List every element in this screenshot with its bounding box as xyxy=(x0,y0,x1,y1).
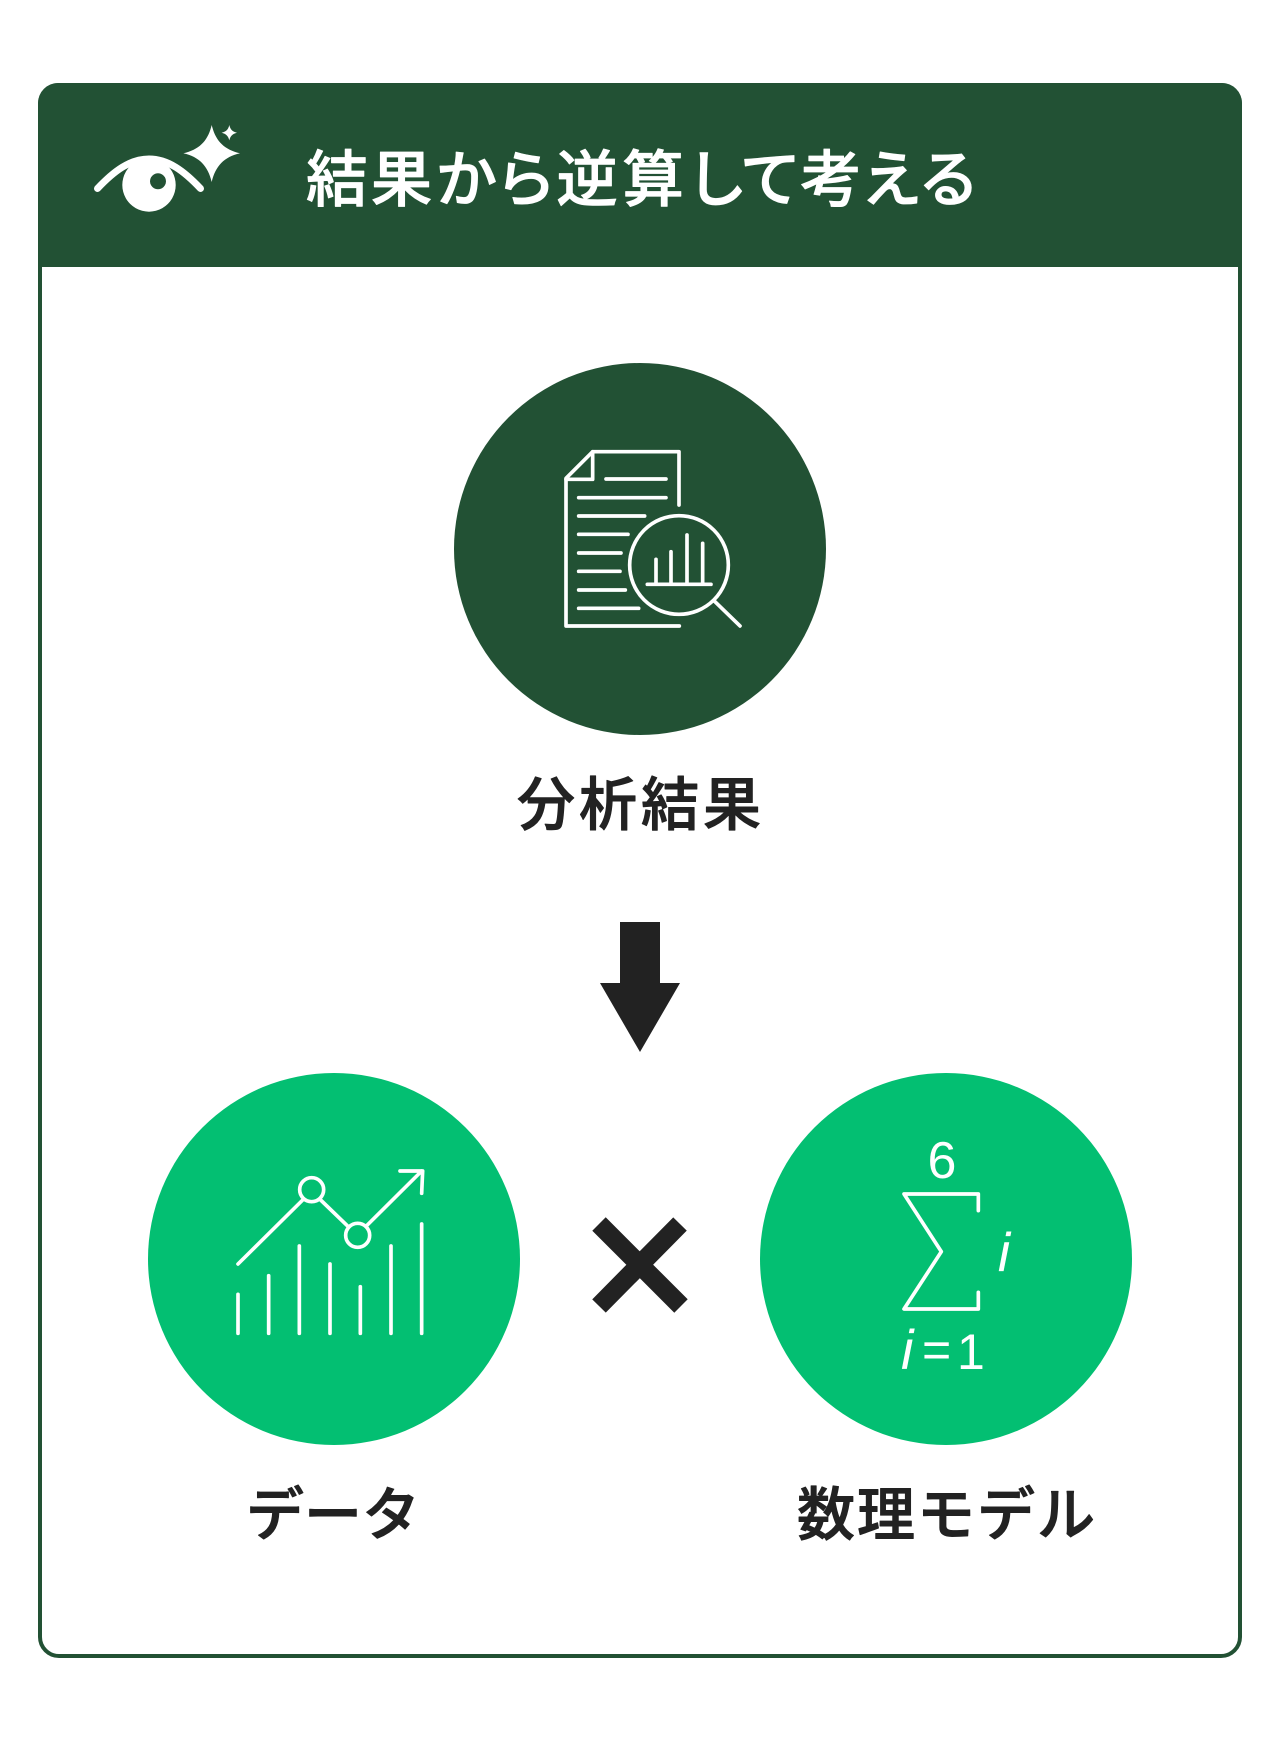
label: math model: 数理モデル xyxy=(797,1483,1097,1548)
formula text: 1 xyxy=(957,1324,985,1380)
title: 結果から逆算して考える xyxy=(306,146,980,215)
formula text: i xyxy=(998,1221,1012,1283)
icon: document with magnifier xyxy=(566,452,740,626)
icon: eye with sparkles xyxy=(98,125,240,212)
circle: data icon xyxy=(148,1073,520,1445)
formula text: 6 xyxy=(928,1132,956,1190)
arrow: down xyxy=(600,922,680,1052)
formula text xyxy=(901,1132,1012,1381)
label: data: データ xyxy=(246,1483,420,1548)
formula text: = xyxy=(922,1322,951,1378)
header band xyxy=(38,83,1242,267)
icon: line and bar chart xyxy=(238,1171,423,1333)
label: analysis result: 分析結果 xyxy=(517,773,765,838)
circle: analysis result icon xyxy=(454,363,826,735)
circle: math model icon xyxy=(760,1073,1132,1445)
formula text: i xyxy=(901,1318,915,1381)
multiply sign xyxy=(599,1224,681,1306)
icon: sigma xyxy=(904,1194,978,1309)
